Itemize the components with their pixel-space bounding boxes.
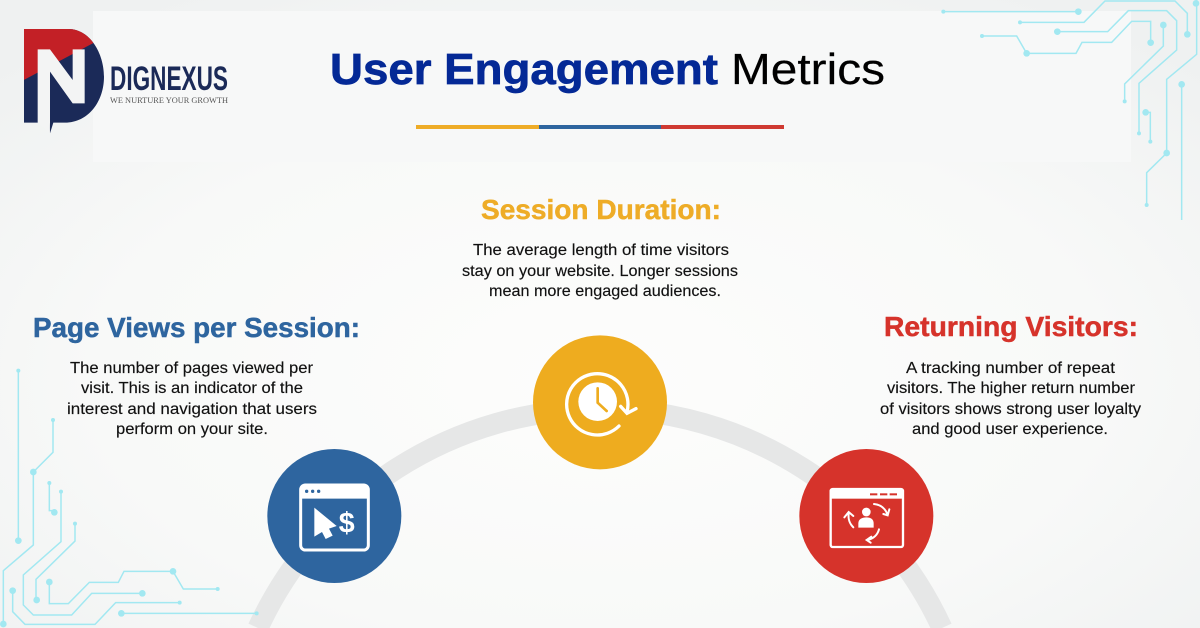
icon: session duration circle (533, 335, 667, 469)
logo wordmark: DIGNEXUS (110, 60, 228, 98)
heading: Session Duration: (481, 194, 721, 225)
description (880, 360, 1141, 438)
title divider (416, 125, 784, 129)
circuit decoration: bottom left (0, 369, 259, 627)
panel: session duration (462, 194, 738, 300)
panel: page views per session (33, 312, 360, 438)
description (462, 242, 738, 300)
heading: Page Views per Session: (33, 312, 360, 343)
description: A tracking number of repeat (906, 360, 1116, 377)
icon: page views circle: $ (339, 508, 355, 540)
description: perform on your site. (116, 421, 268, 438)
heading: Returning Visitors: (884, 311, 1138, 342)
description: visit. This is an indicator of the (81, 380, 303, 397)
title (330, 45, 885, 94)
logo mark (24, 29, 104, 134)
description: The average length of time visitors (473, 242, 729, 259)
description: interest and navigation that users (67, 401, 317, 418)
description: The number of pages viewed per (70, 360, 314, 377)
header panel (93, 11, 1131, 162)
logo: DigNexus (20, 27, 228, 137)
description: mean more engaged audiences. (489, 283, 721, 300)
panel: returning visitors (880, 311, 1141, 438)
title: User Engagement (330, 45, 718, 94)
description (67, 360, 317, 438)
description: of visitors shows strong user loyalty (880, 401, 1141, 418)
icon: returning visitors circle (799, 449, 933, 583)
icon: page views circle (267, 449, 401, 583)
description: stay on your website. Longer sessions (462, 263, 738, 280)
logo tagline: WE NURTURE YOUR GROWTH (110, 95, 228, 105)
description: visitors. The higher return number (887, 380, 1136, 397)
circuit decoration: top right (941, 0, 1199, 220)
description: and good user experience. (912, 421, 1108, 438)
curved arc connector (258, 409, 942, 628)
title: Metrics (731, 45, 885, 94)
